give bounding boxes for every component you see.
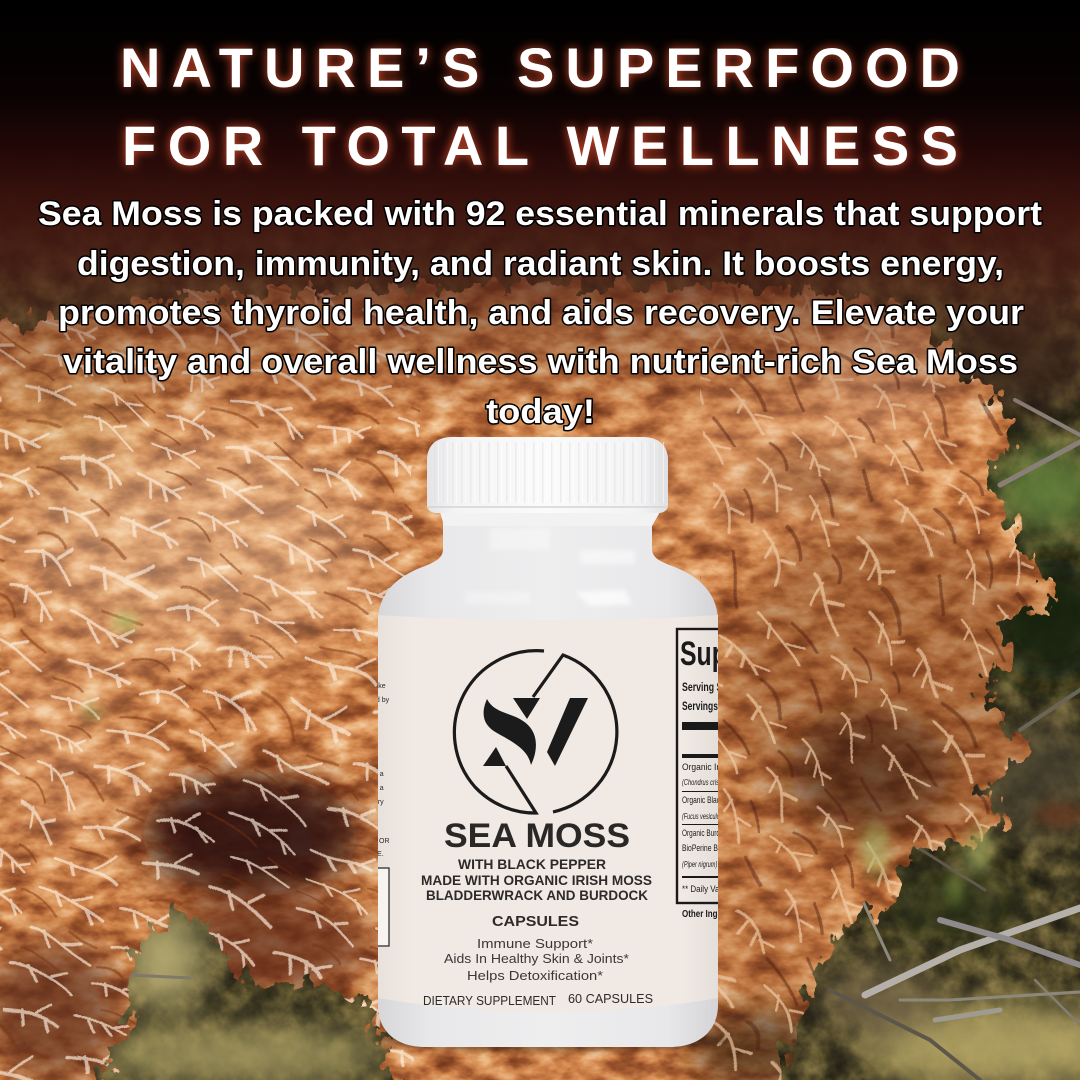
label: supplement facts panel: Other Ingred	[682, 909, 730, 920]
label: footer line: 60 CAPSULES	[568, 991, 653, 1006]
description paragraph: digestion, immunity, and radiant skin. It boosts energy,	[77, 245, 1004, 283]
label: side directions: ut a	[372, 785, 384, 792]
description paragraph: promotes thyroid health, and aids recovery. Elevate your	[58, 294, 1024, 332]
bottle highlights	[465, 528, 635, 606]
background: moss fibres right	[700, 280, 1080, 1080]
label: subtitle lines	[421, 856, 652, 903]
label: benefits: Aids In Healthy Skin & Joints*	[444, 951, 629, 966]
label: benefits	[444, 936, 629, 983]
title line 2: FOR TOTAL WELLNESS	[122, 114, 958, 177]
background: moss green tips	[82, 614, 992, 906]
supplement bottle	[368, 437, 742, 1052]
label: side directions: nd by	[372, 697, 390, 704]
label: supplement facts panel: Organic Bladder	[682, 795, 730, 805]
label: supplement facts panel: Supp	[680, 635, 742, 673]
label: supplement facts panel: BioPerine Black	[682, 843, 730, 853]
label: supplement facts panel	[676, 628, 718, 919]
product label	[378, 615, 718, 1012]
title	[120, 36, 960, 177]
label: side directions: D	[372, 825, 377, 832]
label: supplement facts panel: (Fucus vesiculosus)	[682, 812, 730, 821]
background: twigs	[130, 400, 1080, 1080]
description paragraph: vitality and overall wellness with nutrient-rich Sea Moss	[63, 343, 1018, 381]
label: side directions: tary	[372, 799, 384, 806]
label: benefits: Helps Detoxification*	[467, 968, 603, 983]
description paragraph	[38, 195, 1042, 431]
background: moss fibres left	[0, 280, 420, 1080]
label: side directions	[378, 682, 390, 947]
label: supplement facts panel: (Chondrus crispus)	[682, 778, 730, 787]
bottle shadow	[368, 1028, 728, 1052]
description paragraph: Sea Moss is packed with 92 essential minerals that support	[38, 195, 1042, 233]
label: footer line	[423, 991, 653, 1008]
label: subtitle lines: BLADDERWRACK AND BURDOCK	[426, 887, 648, 903]
label: supplement facts panel: Organic Irish	[682, 762, 730, 772]
label: subtitle lines: MADE WITH ORGANIC IRISH MOSS	[421, 872, 652, 888]
label: supplement facts panel: Servings Per	[682, 699, 734, 713]
label: benefits: Immune Support*	[477, 936, 593, 951]
label: supplement facts panel: (Piper nigrum) Fruit	[682, 860, 731, 869]
background: sea moss mass	[0, 274, 1058, 1080]
label: side directions: CE.	[372, 851, 384, 858]
label: side directions: D OR	[372, 838, 390, 845]
logo: SV monogram in ring	[454, 651, 617, 813]
label: side directions: rake	[372, 683, 386, 690]
bottle body	[378, 522, 718, 1047]
label: supplement facts panel: Serving Size	[682, 680, 734, 694]
title line 1: NATURE’S SUPERFOOD	[120, 36, 960, 99]
label: capsules: CAPSULES	[492, 913, 579, 930]
top dark gradient overlay	[0, 0, 1080, 420]
label: subtitle lines: WITH BLACK PEPPER	[458, 856, 606, 872]
label: product name: SEA MOSS	[444, 817, 630, 855]
bottle cap	[427, 437, 668, 513]
label: supplement facts panel: ** Daily Value	[682, 884, 730, 894]
label: side directions: th a	[372, 771, 384, 778]
description paragraph: today!	[486, 393, 595, 431]
label: footer line: DIETARY SUPPLEMENT	[423, 993, 556, 1008]
bottle neck ring	[440, 512, 660, 526]
label: supplement facts panel: Organic Burdock	[682, 828, 730, 838]
